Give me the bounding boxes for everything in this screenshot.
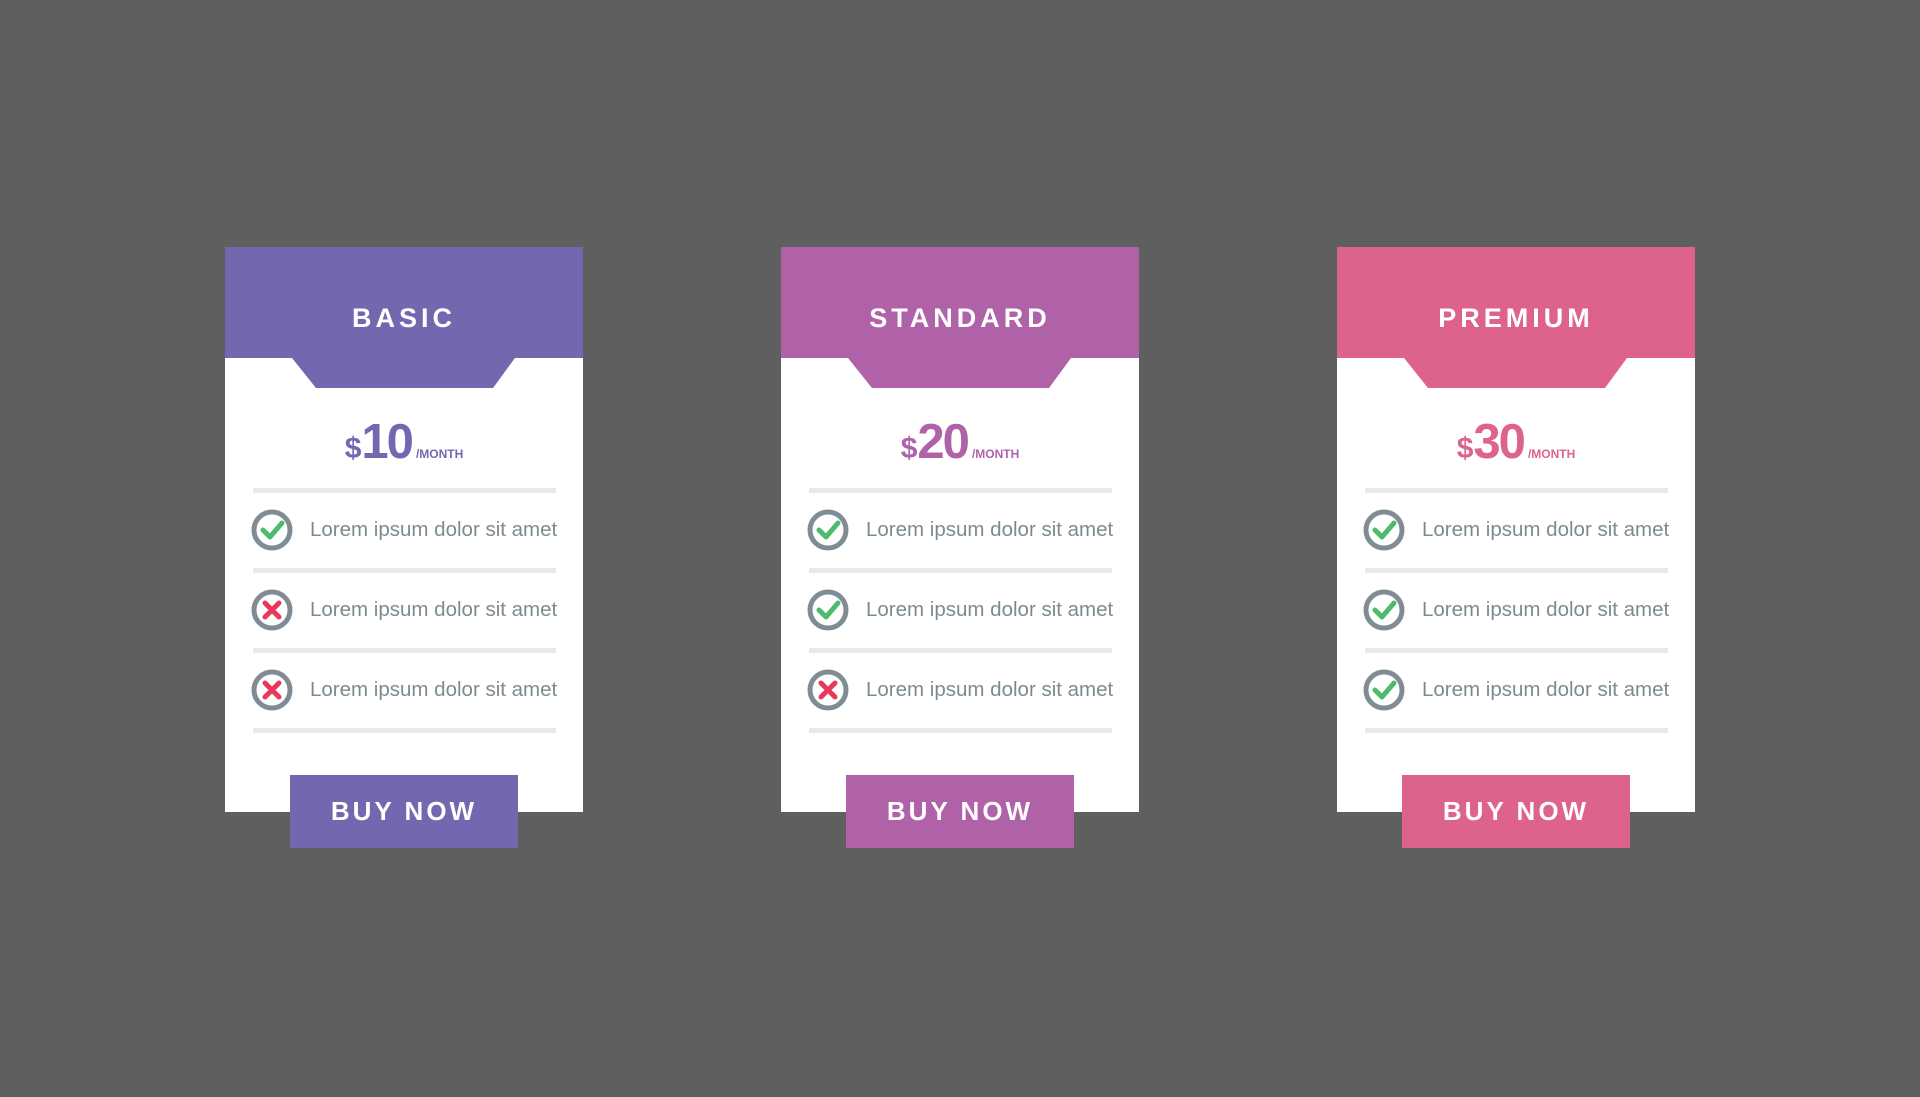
feature row 1: check: [808, 510, 1114, 550]
header: premium: [1337, 247, 1695, 388]
price: basic: $10 /MONTH: [345, 415, 463, 469]
title: standard: STANDARD: [869, 303, 1051, 333]
feature row 1: check: Lorem ipsum dolor sit amet: [310, 518, 557, 541]
feature row 3: check: [1364, 670, 1670, 710]
button: basic: [290, 775, 518, 848]
feature row 3: cross: [252, 670, 558, 710]
feature row 1: check: Lorem ipsum dolor sit amet: [1422, 518, 1669, 541]
feature row 2: check: [808, 590, 1114, 630]
card: standard: [781, 247, 1139, 848]
feature row 3: cross: Lorem ipsum dolor sit amet: [866, 678, 1113, 701]
feature row 1: check: Lorem ipsum dolor sit amet: [866, 518, 1113, 541]
title: basic: BASIC: [352, 303, 456, 333]
button: standard: [846, 775, 1074, 848]
card: premium: [1337, 247, 1695, 848]
button: standard: BUY NOW: [887, 796, 1033, 826]
feature row 3: cross: Lorem ipsum dolor sit amet: [310, 678, 557, 701]
feature row 2: cross: Lorem ipsum dolor sit amet: [310, 598, 557, 621]
feature row 1: check: [1364, 510, 1670, 550]
feature row 3: check: Lorem ipsum dolor sit amet: [1422, 678, 1669, 701]
title: premium: PREMIUM: [1438, 303, 1594, 333]
feature row 2: check: Lorem ipsum dolor sit amet: [1422, 598, 1669, 621]
header: standard: [781, 247, 1139, 388]
button: premium: [1402, 775, 1630, 848]
feature row 1: check: [252, 510, 558, 550]
button: premium: BUY NOW: [1443, 796, 1589, 826]
price: standard: $20 /MONTH: [901, 415, 1019, 469]
feature row 3: cross: [808, 670, 1114, 710]
feature row 2: check: [1364, 590, 1670, 630]
button: basic: BUY NOW: [331, 796, 477, 826]
card: basic: [225, 247, 583, 848]
feature row 2: check: Lorem ipsum dolor sit amet: [866, 598, 1113, 621]
header: basic: [225, 247, 583, 388]
price: premium: $30 /MONTH: [1457, 415, 1575, 469]
feature row 2: cross: [252, 590, 558, 630]
